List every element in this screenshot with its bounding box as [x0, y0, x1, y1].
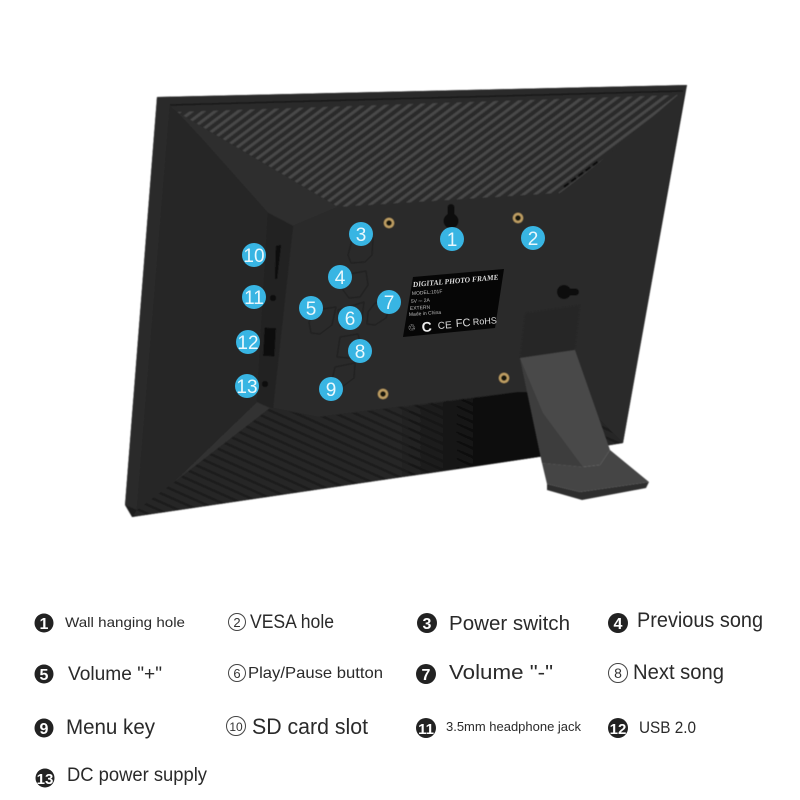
marker 6: 6 — [345, 309, 355, 330]
product label: RoHS — [472, 315, 497, 327]
legend item 3: Power switch — [449, 613, 570, 635]
product label: FC — [455, 317, 471, 330]
legend — [34, 609, 763, 788]
legend item 10: SD card slot — [252, 714, 368, 739]
legend item 12 — [608, 718, 696, 738]
marker 6 — [338, 306, 362, 330]
central panel — [273, 193, 596, 417]
legend item 11: 3.5mm headphone jack — [446, 719, 581, 734]
marker 11: 11 — [244, 288, 264, 309]
product label: CE — [437, 320, 452, 332]
legend item 6: 6 — [233, 666, 241, 681]
product label: ♲ — [407, 322, 416, 333]
marker 3: 3 — [356, 225, 366, 246]
top band groove — [170, 91, 683, 105]
right facet — [575, 95, 684, 443]
product label: MODEL:101F — [412, 289, 443, 297]
legend item 1: 1 — [40, 616, 49, 633]
stand shaded facet — [520, 358, 583, 467]
marker 5 — [299, 296, 323, 320]
legend item 12: USB 2.0 — [639, 718, 696, 737]
port strip — [257, 213, 293, 408]
upper left wedge — [177, 112, 338, 226]
legend item 11: 11 — [418, 721, 434, 738]
top frame band — [157, 85, 687, 112]
marker 8 — [348, 339, 372, 363]
marker 5: 5 — [306, 299, 316, 320]
legend item 1: Wall hanging hole — [65, 614, 185, 630]
legend item 13: DC power supply — [67, 765, 207, 786]
legend item 2: VESA hole — [250, 612, 334, 633]
striped top facet — [177, 95, 678, 207]
dark shadow near stand — [400, 392, 545, 478]
second keyhole — [557, 285, 579, 299]
kickstand — [520, 305, 649, 500]
marker 9 — [319, 377, 343, 401]
blue number markers — [235, 222, 545, 401]
lower left wedge — [173, 402, 270, 483]
product label: C — [421, 318, 432, 335]
stand foot front — [547, 482, 649, 500]
legend item 7 — [416, 662, 553, 684]
legend item 11 — [416, 718, 581, 738]
product label: Made in China — [409, 310, 442, 318]
photo frame back — [125, 85, 687, 517]
legend item 1 — [34, 614, 185, 633]
legend item 10: 10 — [229, 720, 243, 734]
marker 3 — [349, 222, 373, 246]
marker 4 — [328, 265, 352, 289]
marker 7 — [377, 290, 401, 314]
stand foot top — [542, 450, 649, 492]
legend item 12: 12 — [610, 721, 626, 738]
striped bottom facet — [132, 392, 623, 517]
legend item 7: 7 — [422, 667, 431, 684]
marker 1: 1 — [447, 230, 457, 251]
legend item 13: 13 — [37, 771, 53, 788]
marker 8: 8 — [355, 342, 365, 363]
product label: EXTERN — [410, 305, 431, 312]
product label — [403, 269, 504, 337]
stand lower body — [520, 350, 610, 467]
left facet — [137, 106, 268, 510]
marker 1 — [440, 227, 464, 251]
brass VESA screws — [379, 214, 522, 398]
legend item 4: 4 — [614, 616, 623, 633]
marker 12: 12 — [237, 333, 259, 354]
control buttons — [309, 238, 392, 387]
marker 4: 4 — [335, 268, 346, 289]
ports — [262, 245, 281, 387]
outer frame — [125, 85, 687, 517]
legend item 5: 5 — [40, 667, 49, 684]
marker 2: 2 — [528, 229, 538, 250]
marker 9: 9 — [326, 380, 336, 401]
legend item 8: 8 — [614, 665, 622, 681]
wall hanging keyhole — [444, 204, 458, 228]
legend item 2: 2 — [233, 615, 241, 630]
marker 2 — [521, 226, 545, 250]
legend item 4: Previous song — [637, 609, 763, 632]
stand upper arm — [520, 305, 580, 358]
left frame band — [125, 97, 170, 510]
legend item 9: 9 — [40, 721, 49, 738]
product label: 5V ⎓ 2A — [411, 298, 431, 305]
legend item 5: Volume "+" — [68, 664, 162, 685]
marker 10: 10 — [243, 246, 265, 267]
legend item 7: Volume "-" — [449, 662, 553, 684]
legend item 3: 3 — [423, 616, 432, 633]
product label: DIGITAL PHOTO FRAME — [411, 273, 499, 289]
speaker vent — [564, 160, 600, 187]
marker 7: 7 — [384, 293, 394, 314]
marker 13: 13 — [236, 377, 258, 398]
legend item 8: Next song — [633, 661, 724, 684]
legend item 6: Play/Pause button — [248, 665, 383, 682]
legend item 9: Menu key — [66, 716, 155, 739]
upper right wedge — [560, 95, 678, 206]
